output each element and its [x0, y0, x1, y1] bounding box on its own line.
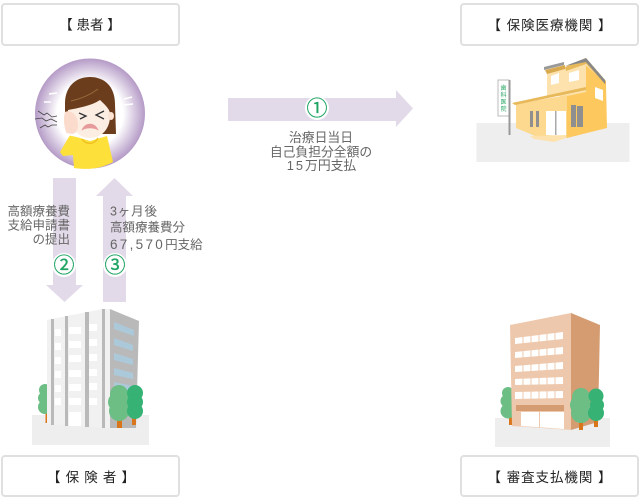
main eave	[512, 87, 586, 105]
text: reimbursement after three months: 高額療養費分	[110, 220, 186, 234]
text: payment on treatment day: 15万円支払	[287, 158, 356, 173]
roof	[545, 65, 565, 74]
arrow 2: patient to insurer: ②	[54, 254, 74, 278]
heading: insurer	[2, 456, 179, 496]
side windows	[114, 322, 134, 336]
left tree	[500, 387, 516, 425]
windows row 3	[515, 362, 563, 372]
right windows	[571, 105, 576, 127]
lower front wall	[516, 95, 567, 138]
arrow 1: patient to medical institution	[228, 90, 413, 127]
heading: review and payment organization	[461, 456, 638, 496]
left windows	[530, 111, 533, 127]
windows row 1	[515, 332, 563, 344]
icon: review organization building	[495, 313, 610, 447]
text: reimbursement after three months: 3ヶ月後	[110, 204, 157, 218]
side wall	[571, 313, 600, 430]
heading: patient: 【 患者 】	[59, 18, 121, 32]
motion lines	[44, 93, 133, 105]
mouth	[83, 124, 97, 129]
icon: medical institution building: 科	[500, 91, 507, 99]
entrance	[546, 110, 566, 136]
front windows	[55, 329, 61, 336]
front wall	[47, 309, 110, 428]
front wall	[510, 313, 571, 430]
text: payment on treatment day	[270, 130, 372, 173]
left tree	[38, 384, 52, 423]
pain lines	[35, 111, 57, 128]
text: reimbursement after three months: 67,570円支給	[110, 237, 203, 252]
windows row 2	[515, 347, 563, 358]
text: submission of application: 高額療養費	[7, 204, 70, 218]
steps	[530, 135, 566, 142]
windows row 5	[515, 391, 563, 399]
ground	[495, 418, 610, 447]
window dividers	[523, 332, 555, 400]
front pillars	[51, 319, 54, 425]
windows row 4	[515, 377, 563, 385]
ear	[108, 112, 114, 120]
sweater	[60, 135, 113, 169]
arrow 2: patient to insurer	[46, 178, 83, 302]
entrance	[521, 412, 564, 429]
hair	[65, 77, 116, 134]
heading: review and payment organization: 【 審査支払機関 】	[488, 470, 612, 485]
icon: medical institution building	[476, 58, 630, 162]
heading: patient	[2, 4, 179, 45]
eyes closed	[79, 111, 104, 119]
ground	[476, 123, 630, 162]
text: reimbursement after three months	[110, 204, 203, 252]
icon: insurer office building	[32, 309, 149, 445]
icon: medical institution building: 院	[500, 105, 507, 113]
arrow 3: insurer to patient: ③	[104, 254, 126, 278]
upper storey	[547, 60, 586, 96]
text: submission of application: の提出	[32, 232, 70, 246]
heading: medical institution: 【 保険医療機関 】	[488, 18, 612, 33]
side wall	[110, 309, 139, 428]
text: submission of application	[7, 204, 70, 246]
hand on cheek	[64, 111, 78, 134]
icon: medical institution building: 歯	[500, 84, 507, 92]
text: payment on treatment day: 自己負担分全額の	[270, 144, 372, 160]
sign band	[516, 405, 564, 411]
text: submission of application: 支給申請書	[7, 218, 70, 232]
icon: medical institution building: 医	[500, 99, 507, 106]
collar	[82, 138, 98, 143]
icon: patient with toothache	[35, 58, 145, 169]
heading: insurer: 【 保 険 者 】	[47, 470, 135, 485]
ground	[32, 415, 149, 445]
right trees	[570, 388, 604, 430]
upper windows	[551, 73, 559, 85]
right trees	[108, 385, 143, 428]
hair highlight	[71, 89, 98, 101]
sign	[498, 80, 509, 116]
face	[68, 100, 110, 138]
right side wall	[567, 65, 607, 138]
arrow 3: insurer to patient	[96, 178, 133, 302]
arrow 1: patient to medical institution: ①	[306, 98, 328, 120]
text: payment on treatment day: 治療日当日	[289, 130, 353, 145]
heading: medical institution	[461, 4, 638, 45]
wrist cuff	[67, 134, 77, 136]
